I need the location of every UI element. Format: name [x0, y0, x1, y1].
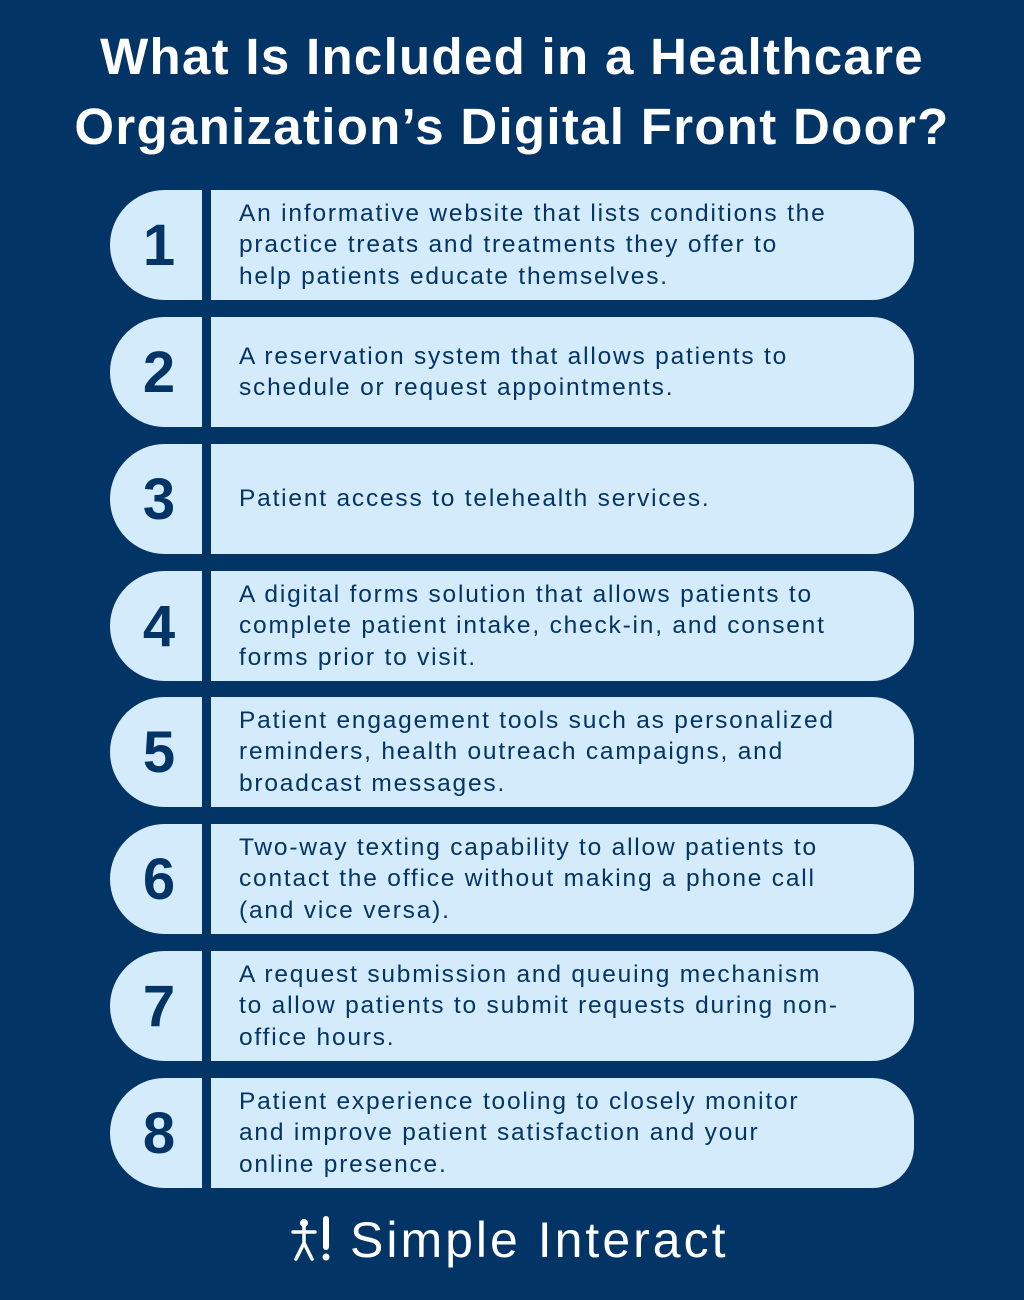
item 8: and improve patient satisfaction and your: [239, 1119, 760, 1146]
item 7: office hours.: [239, 1024, 395, 1051]
item 4: forms prior to visit.: [239, 644, 477, 671]
item 6: [110, 824, 914, 934]
item 5: reminders, health outreach campaigns, and: [239, 738, 784, 765]
item 1: help patients educate themselves.: [239, 263, 669, 290]
item 6: contact the office without making a phone call: [239, 865, 816, 892]
title: Organization’s Digital Front Door?: [74, 98, 950, 155]
item 5: [110, 697, 914, 807]
item 7: to allow patients to submit requests during non-: [239, 992, 839, 1019]
item 3: [110, 444, 914, 554]
item 2: A reservation system that allows patients to: [239, 342, 788, 370]
item 8: 8: [143, 1101, 175, 1166]
item 8: [110, 1078, 914, 1188]
logo: Simple Interact: [350, 1212, 728, 1268]
item 7: [110, 951, 914, 1061]
item 1: [110, 190, 914, 300]
item 1: 1: [143, 213, 175, 278]
item 7: A request submission and queuing mechanism: [239, 961, 821, 988]
item 2: 2: [143, 340, 175, 405]
item 6: Two-way texting capability to allow patients to: [239, 834, 818, 861]
item 5: broadcast messages.: [239, 770, 506, 797]
item 4: 4: [143, 594, 175, 659]
item 6: 6: [143, 847, 175, 912]
item 8: Patient experience tooling to closely monitor: [239, 1088, 799, 1115]
item 8: online presence.: [239, 1151, 448, 1178]
item 4: A digital forms solution that allows patients to: [239, 581, 813, 608]
title: What Is Included in a Healthcare: [100, 28, 924, 85]
item 3: 3: [143, 467, 175, 532]
item 4: [110, 571, 914, 681]
item 6: (and vice versa).: [239, 897, 451, 924]
item 1: An informative website that lists conditions the: [239, 200, 827, 227]
item 3: Patient access to telehealth services.: [239, 485, 711, 512]
icon: person: [291, 1216, 330, 1261]
item 2: schedule or request appointments.: [239, 374, 674, 401]
item 7: 7: [143, 974, 175, 1039]
item 1: practice treats and treatments they offer to: [239, 231, 778, 258]
item 5: 5: [143, 720, 175, 785]
title: [74, 28, 950, 155]
item 5: Patient engagement tools such as personalized: [239, 707, 835, 734]
item 4: complete patient intake, check-in, and consent: [239, 612, 826, 639]
item 2: [110, 317, 914, 427]
